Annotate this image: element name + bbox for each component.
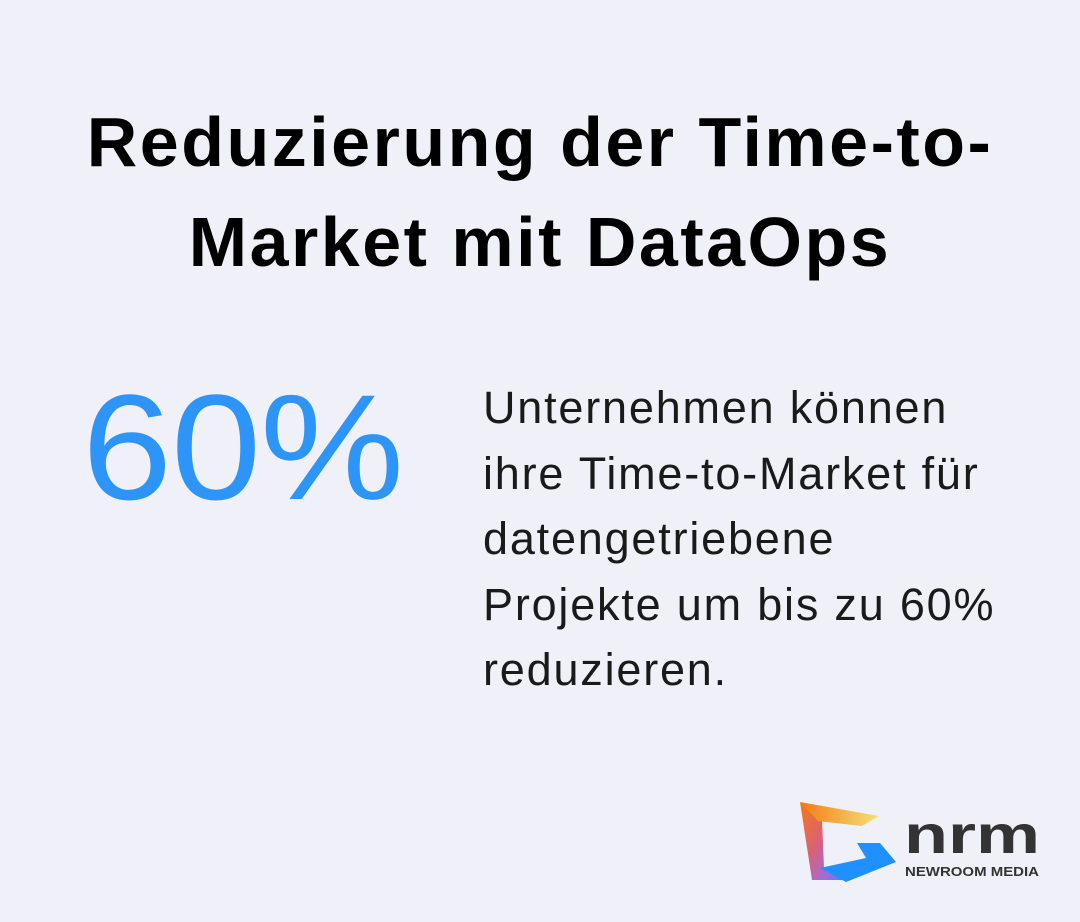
description text: ihre Time-to-Market für — [483, 448, 980, 498]
description text — [483, 382, 995, 695]
big stat: 60%: 60% — [82, 363, 403, 531]
description text: reduzieren. — [483, 644, 728, 695]
icon: logo mark — [800, 802, 896, 882]
logo text — [904, 805, 1040, 879]
title — [87, 103, 993, 281]
description text: datengetriebene — [483, 513, 835, 564]
description text: Projekte um bis zu 60% — [483, 578, 995, 630]
logo: nrm newroom media — [800, 802, 1040, 882]
title: Market mit DataOps — [189, 203, 891, 281]
logo text: NEWROOM MEDIA — [905, 865, 1039, 879]
logo text: nrm — [904, 805, 1040, 865]
description text: Unternehmen können — [483, 382, 948, 433]
title: Reduzierung der Time-to- — [87, 103, 993, 181]
